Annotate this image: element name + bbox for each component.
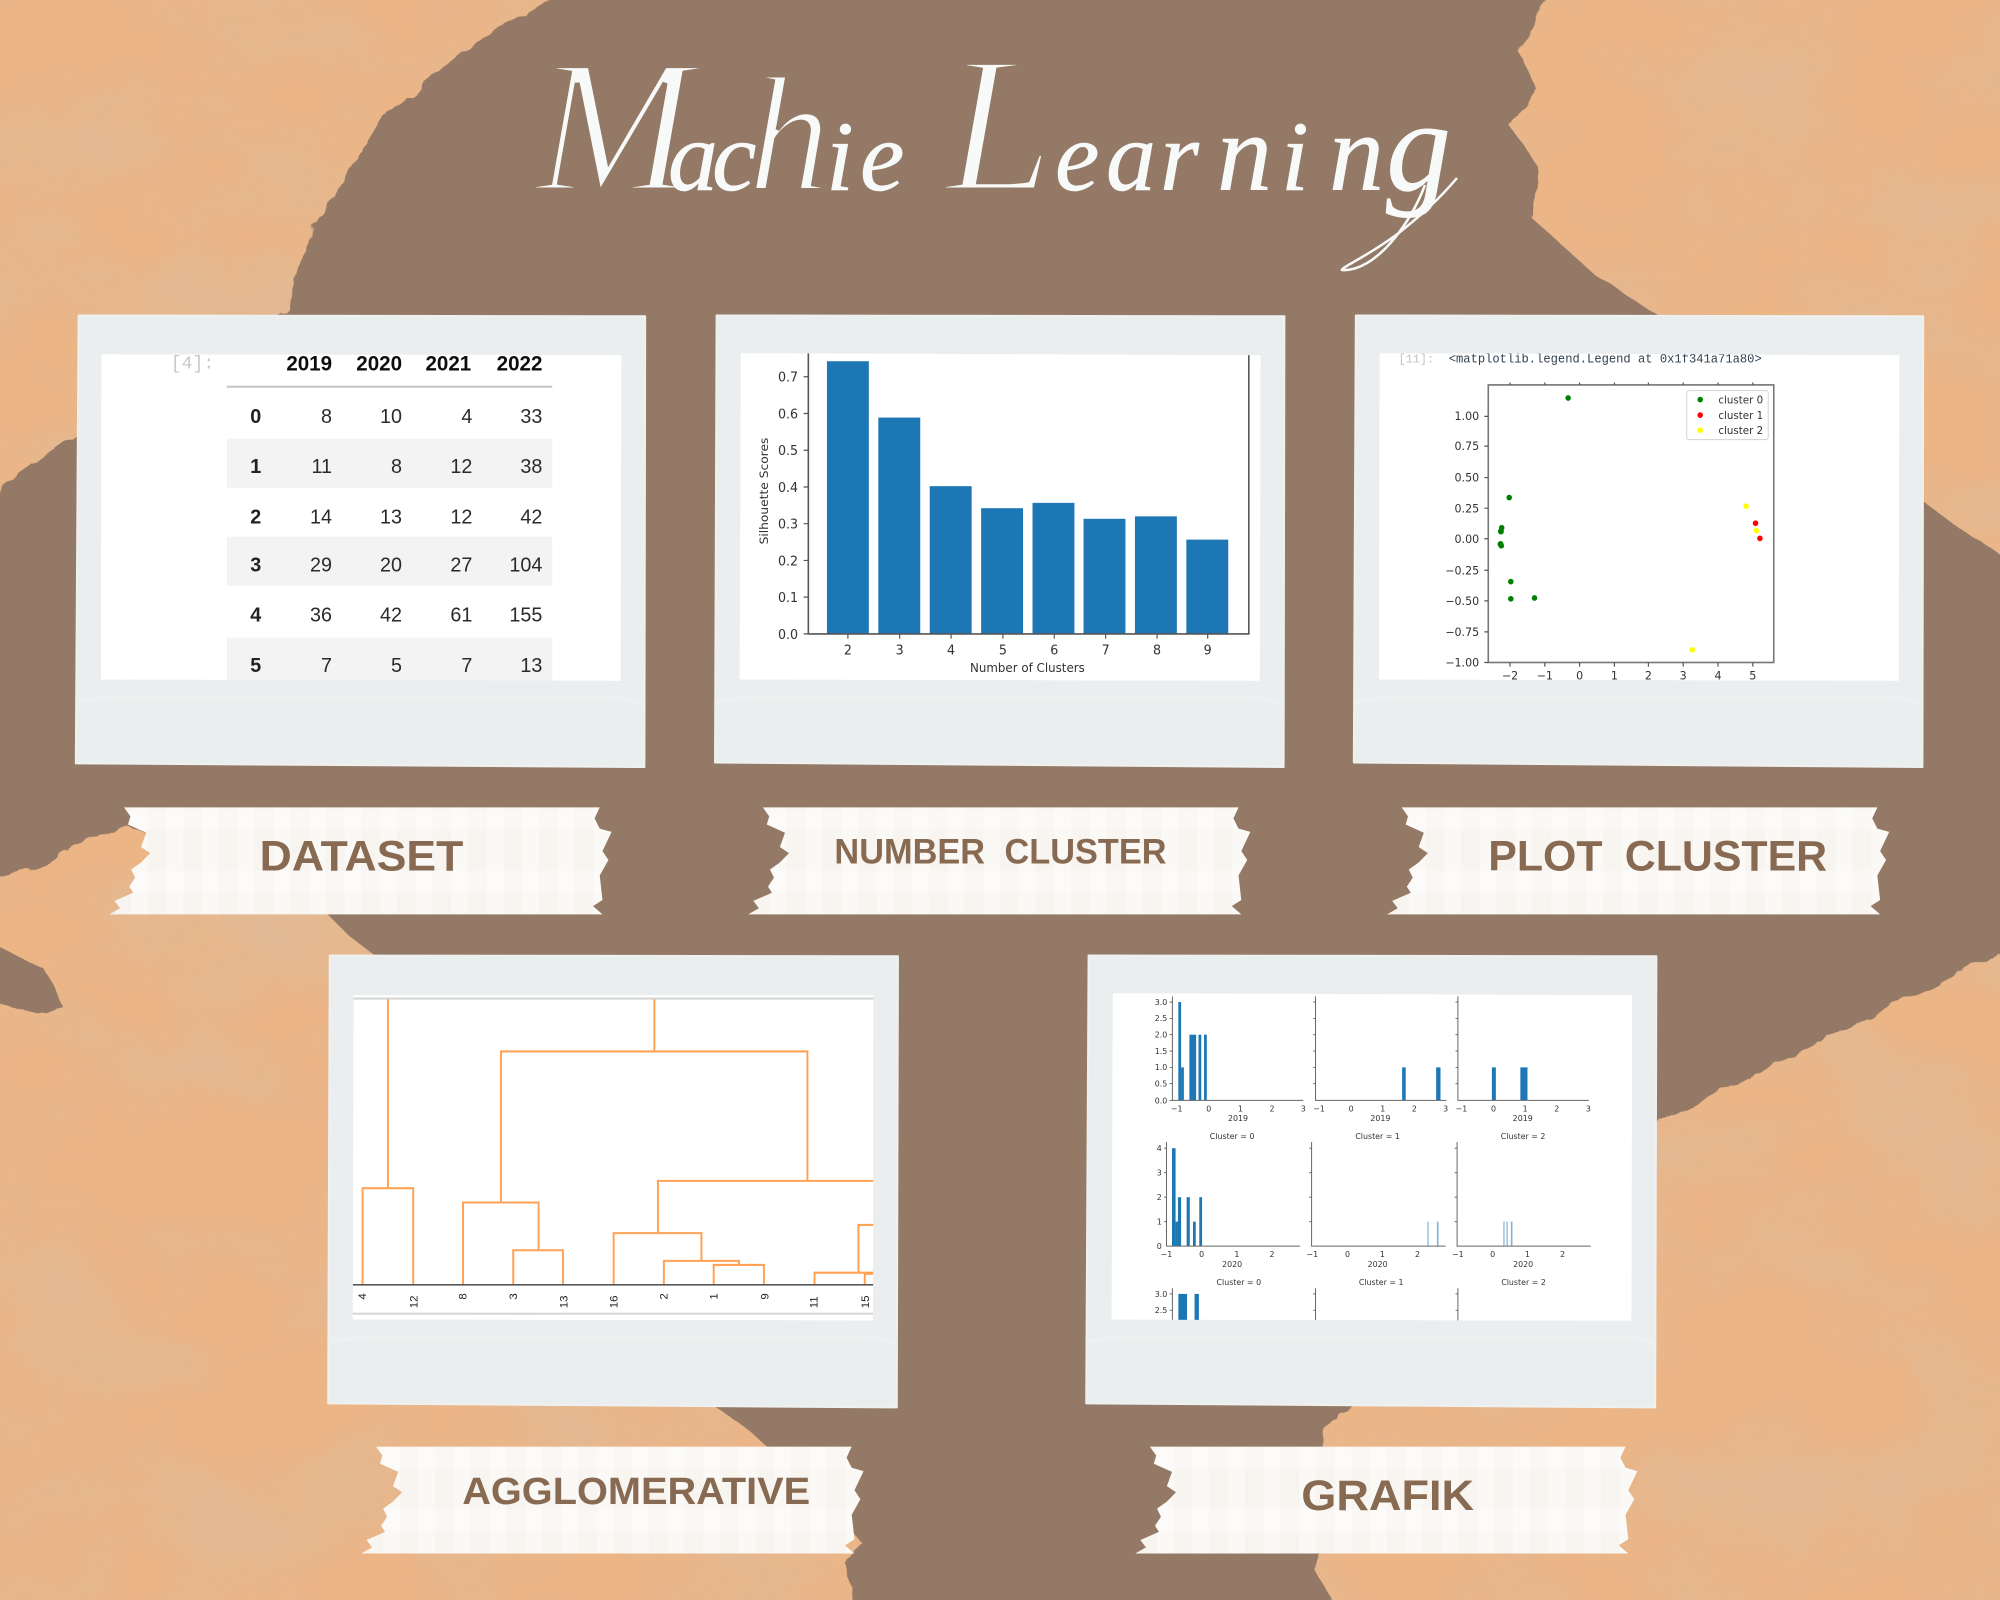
- histogram grid: 2.0: [1155, 1030, 1167, 1040]
- label: number cluster: [748, 807, 1250, 914]
- dataset table: 10: [380, 406, 402, 428]
- dataset table: 8: [321, 406, 332, 428]
- dataset table: 42: [380, 604, 402, 627]
- dataset table: 7: [461, 655, 472, 677]
- histogram grid: 1.0: [1155, 1063, 1167, 1072]
- histogram grid: 3: [1586, 1104, 1591, 1113]
- dataset table: 7: [321, 655, 332, 677]
- bar chart: silhouette scores: [740, 353, 1261, 681]
- histogram grid: 0: [1490, 1250, 1495, 1259]
- scatter plot: 0.75: [1455, 440, 1479, 453]
- histogram grid: 1: [1523, 1104, 1528, 1113]
- histogram grid: [1112, 993, 1632, 1322]
- histogram grid: 2020: [1513, 1260, 1533, 1269]
- dataset table: 61: [450, 604, 472, 627]
- scatter plot: 0.25: [1455, 502, 1479, 515]
- histogram grid: 0: [1157, 1242, 1162, 1251]
- histogram grid: −1: [1313, 1104, 1325, 1113]
- dataset table: 5: [250, 655, 261, 677]
- panel: number cluster: [715, 316, 1284, 767]
- histogram grid: 1: [1380, 1250, 1385, 1259]
- bar chart: silhouette scores: 0.2: [778, 554, 798, 569]
- histogram grid: Cluster = 2: [1501, 1278, 1546, 1287]
- title: n: [1329, 92, 1384, 214]
- dataset table: 104: [509, 554, 542, 577]
- histogram grid: 2019: [1513, 1114, 1533, 1123]
- scatter plot: <matplotlib.legend.Legend at 0x1f341a71a80>: [1449, 352, 1762, 367]
- histogram grid: 3: [1301, 1104, 1306, 1113]
- title: e: [1055, 101, 1099, 212]
- histogram grid: 2.5: [1155, 1306, 1167, 1315]
- histogram grid: 1: [1157, 1217, 1162, 1227]
- dendrogram: 4: [357, 1293, 369, 1300]
- histogram grid: 1: [1525, 1250, 1530, 1259]
- histogram grid: 2020: [1368, 1260, 1388, 1269]
- dendrogram: 2: [659, 1293, 670, 1300]
- title: h: [748, 43, 830, 226]
- dataset table: 29: [310, 554, 332, 577]
- dendrogram: 12: [409, 1295, 421, 1308]
- scatter plot: 2: [1645, 669, 1652, 683]
- dendrogram: 9: [759, 1293, 771, 1300]
- title: n: [1217, 92, 1272, 214]
- histogram grid: −1: [1307, 1250, 1318, 1259]
- dendrogram: 11: [809, 1296, 821, 1308]
- histogram grid: 1: [1238, 1104, 1243, 1113]
- label: dataset: DATASET: [260, 832, 464, 880]
- histogram grid: 2: [1560, 1250, 1565, 1259]
- dataset table: 14: [310, 506, 332, 529]
- histogram grid: 3: [1157, 1168, 1162, 1178]
- dataset table: 4: [461, 406, 472, 428]
- title: a: [668, 101, 718, 212]
- scatter plot: cluster 1: [1718, 410, 1763, 422]
- histogram grid: 2019: [1228, 1114, 1248, 1123]
- histogram grid: 0: [1206, 1104, 1211, 1113]
- dendrogram: 1: [709, 1293, 721, 1300]
- dataset table: 5: [391, 655, 402, 677]
- dendrogram: [353, 995, 875, 1320]
- histogram grid: 2: [1270, 1104, 1275, 1113]
- photo frame: [328, 956, 898, 1407]
- histogram grid: 0.5: [1155, 1079, 1167, 1089]
- bar chart: silhouette scores: 0.6: [778, 407, 798, 422]
- histogram grid: −1: [1171, 1104, 1183, 1113]
- scatter plot: 3: [1680, 669, 1687, 683]
- title: i: [1281, 101, 1309, 212]
- dataset table: 4: [250, 604, 262, 627]
- dendrogram: 15: [860, 1295, 872, 1308]
- title: i: [826, 101, 854, 212]
- dendrogram: 3: [508, 1293, 520, 1300]
- histogram grid: 0: [1491, 1104, 1496, 1113]
- histogram grid: 4: [1157, 1144, 1162, 1153]
- bar chart: silhouette scores: 0.3: [778, 517, 798, 533]
- bar chart: silhouette scores: 8: [1153, 643, 1161, 658]
- panel: agglomerative: [328, 956, 898, 1407]
- dataset table: 2022: [497, 352, 542, 376]
- histogram grid: Cluster = 0: [1210, 1132, 1254, 1141]
- histogram grid: 0: [1349, 1104, 1354, 1113]
- title: e: [860, 101, 929, 212]
- bar chart: silhouette scores: Silhouette Scores: [757, 438, 771, 544]
- bar chart: silhouette scores: 2: [844, 643, 852, 658]
- dataset table: 155: [509, 604, 542, 627]
- bar chart: silhouette scores: 3: [896, 643, 904, 658]
- bar chart: silhouette scores: 0.0: [778, 628, 798, 643]
- histogram grid: −1: [1456, 1104, 1467, 1113]
- bar chart: silhouette scores: Number of Clusters: [970, 661, 1085, 675]
- dataset table: 11: [312, 456, 332, 478]
- dendrogram: 16: [609, 1295, 621, 1308]
- histogram grid: 2019: [1370, 1114, 1390, 1123]
- histogram grid: 2020: [1222, 1260, 1242, 1269]
- title: [532, 17, 1457, 270]
- title: r: [1160, 101, 1200, 212]
- photo frame: [1086, 956, 1656, 1407]
- histogram grid: Cluster = 0: [1217, 1278, 1261, 1287]
- histogram grid: 2.5: [1155, 1014, 1167, 1023]
- panel: grafik: [1086, 956, 1656, 1407]
- histogram grid: 1: [1380, 1104, 1385, 1113]
- bar chart: silhouette scores: 0.4: [778, 481, 798, 496]
- histogram grid: −1: [1452, 1250, 1464, 1259]
- histogram grid: 1: [1234, 1250, 1239, 1259]
- histogram grid: 3.0: [1155, 1290, 1167, 1299]
- bar chart: silhouette scores: 0.1: [778, 591, 798, 606]
- histogram grid: 0.0: [1155, 1096, 1167, 1105]
- scatter plot: 1.00: [1455, 410, 1479, 423]
- histogram grid: 3: [1443, 1104, 1448, 1113]
- scatter plot: [1379, 352, 1899, 683]
- scatter plot: cluster 2: [1718, 425, 1763, 437]
- bar chart: silhouette scores: 7: [1102, 643, 1110, 658]
- dataset table: 8: [391, 456, 402, 478]
- dataset table: 27: [450, 554, 472, 577]
- dataset table: 12: [450, 506, 472, 529]
- histogram grid: 2: [1412, 1104, 1417, 1113]
- dataset table: 2020: [356, 352, 402, 376]
- histogram grid: 1.5: [1155, 1047, 1167, 1056]
- title: a: [1106, 101, 1156, 212]
- dataset table: 0: [250, 406, 261, 428]
- scatter plot: −1.00: [1445, 656, 1479, 670]
- bar chart: silhouette scores: 9: [1204, 643, 1212, 658]
- dataset table: 20: [380, 554, 402, 577]
- dataset table: 2021: [426, 352, 472, 376]
- dataset table: 33: [520, 406, 542, 428]
- dataset table: 13: [520, 655, 542, 677]
- label: grafik: [1135, 1447, 1637, 1554]
- histogram grid: Cluster = 1: [1359, 1278, 1404, 1287]
- panel: plot cluster: [1354, 316, 1923, 767]
- scatter plot: 4: [1714, 669, 1722, 683]
- histogram grid: 2: [1554, 1104, 1559, 1113]
- scatter plot: [11]:: [1399, 352, 1434, 367]
- bar chart: silhouette scores: 0.5: [778, 444, 798, 459]
- histogram grid: Cluster = 2: [1501, 1132, 1545, 1141]
- dataset table: 36: [310, 604, 332, 627]
- photo frame: [715, 316, 1284, 767]
- histogram grid: Cluster = 1: [1355, 1132, 1400, 1141]
- bar chart: silhouette scores: 0.7: [778, 370, 798, 386]
- bar chart: silhouette scores: 6: [1050, 643, 1058, 658]
- scatter plot: −1: [1537, 669, 1553, 683]
- scatter plot: 5: [1749, 669, 1756, 683]
- histogram grid: 2: [1415, 1250, 1420, 1259]
- title: g: [1386, 75, 1451, 219]
- scatter plot: −0.50: [1445, 595, 1479, 608]
- scatter plot: 0.00: [1455, 533, 1479, 546]
- dataset table: 1: [250, 456, 261, 478]
- label: number cluster: NUMBER CLUSTER: [834, 833, 1167, 871]
- bar chart: silhouette scores: 4: [947, 643, 955, 658]
- scatter plot: 0: [1576, 669, 1583, 683]
- title: L: [942, 17, 1053, 233]
- histogram grid: 0: [1199, 1250, 1204, 1259]
- label: agglomerative: [361, 1447, 864, 1554]
- dataset table: 2019: [286, 352, 332, 376]
- bars: [1172, 1002, 1527, 1322]
- label: agglomerative: AGGLOMERATIVE: [462, 1471, 810, 1512]
- histogram grid: 2: [1157, 1193, 1162, 1202]
- dendrogram: 8: [458, 1293, 470, 1300]
- histogram grid: 0: [1345, 1250, 1350, 1259]
- title: c: [712, 101, 756, 212]
- scatter plot: −0.75: [1445, 626, 1479, 639]
- bar chart: silhouette scores: 5: [999, 643, 1007, 658]
- dataset table: [101, 352, 621, 682]
- title: M: [532, 22, 702, 232]
- panel: dataset: [76, 316, 645, 767]
- scatter plot: −2: [1502, 669, 1518, 683]
- label: plot cluster: PLOT CLUSTER: [1488, 832, 1827, 880]
- scatter plot: −0.25: [1445, 564, 1479, 577]
- photo frame: [1354, 316, 1923, 767]
- dataset table: 13: [380, 506, 402, 529]
- dataset table: 38: [520, 456, 542, 478]
- label: grafik: GRAFIK: [1301, 1471, 1474, 1519]
- photo frame: [76, 316, 645, 767]
- label: plot cluster: [1387, 807, 1889, 914]
- scatter plot: cluster 0: [1718, 394, 1763, 406]
- dendrogram: 13: [559, 1295, 570, 1308]
- dataset table: 3: [250, 554, 261, 577]
- scatter plot: 1: [1611, 669, 1618, 683]
- scatter plot: 0.50: [1455, 471, 1479, 485]
- histogram grid: 3.0: [1155, 998, 1167, 1007]
- dataset table: 2: [250, 506, 261, 529]
- histogram grid: −1: [1161, 1250, 1172, 1259]
- dataset table: 42: [520, 506, 542, 529]
- label: dataset: [109, 807, 612, 914]
- dataset table: [4]:: [171, 353, 214, 375]
- dataset table: 12: [450, 456, 472, 478]
- histogram grid: 2: [1270, 1250, 1275, 1259]
